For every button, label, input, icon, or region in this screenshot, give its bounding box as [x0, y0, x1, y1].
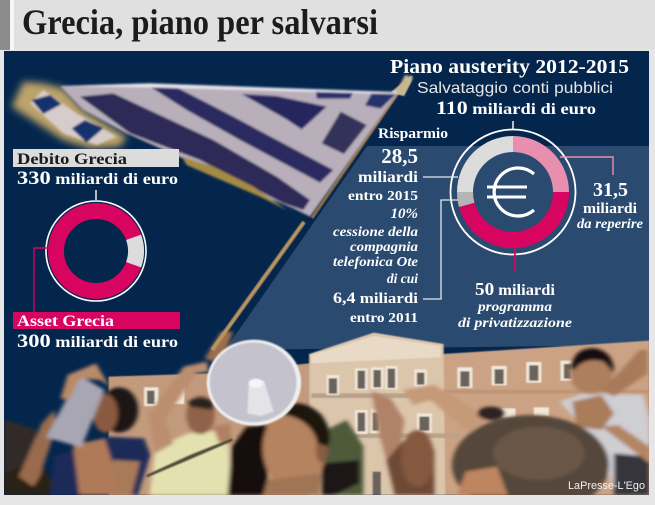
text block: Risparmio: compagnia: [350, 239, 418, 254]
label: Asset Grecia: Asset Grecia: [17, 313, 114, 330]
heading: Piano austerity: [390, 59, 628, 114]
flag: [12, 75, 413, 217]
segment: 28,5 risparmio: [457, 136, 513, 192]
flag pole: [212, 75, 412, 350]
person in yellow shirt: [150, 430, 232, 495]
text block: 31,5 miliardi: [577, 179, 643, 231]
big head foreground: [452, 415, 609, 505]
lighter blue backdrop panel: [225, 146, 649, 350]
text block: Risparmio: Risparmio: [378, 126, 448, 142]
text block: Risparmio: cessione della: [333, 224, 418, 239]
text block: Risparmio: 6,4 miliardi: [333, 290, 418, 307]
donut chart: Debito vs Asset Grecia: [34, 190, 146, 312]
title: Grecia, piano per salvarsi: [22, 2, 378, 42]
segment: 6,4 Ote: [457, 192, 474, 207]
text block: 50 miliardi: [458, 279, 572, 331]
text block: 31,5 miliardi: da reperire: [577, 216, 643, 231]
text block: Risparmio: entro 2011: [350, 310, 418, 325]
person left with bottle: [50, 437, 150, 495]
text block: 50 miliardi: programma: [477, 300, 552, 315]
value: 300 miliardi: 300 miliardi di euro: [17, 331, 178, 352]
text block: Risparmio: 28,5: [381, 144, 418, 168]
text block: Risparmio: telefonica Ote: [333, 254, 418, 269]
text block: 31,5 miliardi: miliardi: [583, 201, 637, 217]
text block: 50 miliardi: 50 miliardi: [475, 279, 556, 299]
text block: Risparmio: miliardi: [358, 169, 419, 186]
photo: megaphone: [146, 340, 301, 477]
connector lines: [512, 121, 514, 129]
gap segment: [126, 235, 144, 267]
text block: Risparmio: entro 2015: [348, 188, 418, 203]
flag fringe tail: [12, 82, 127, 148]
connector lines: [95, 190, 97, 200]
donut chart: 110 miliardi: [423, 121, 613, 299]
photo: crowd: [4, 332, 650, 505]
title bar: [0, 0, 655, 50]
text block: Risparmio: di cui: [387, 271, 418, 286]
segment: 31,5 da reperire: [513, 136, 569, 192]
label: Asset Grecia: [13, 312, 180, 330]
central man: [228, 425, 267, 495]
segment: 50 privatizzazione: [459, 192, 569, 248]
credit: LaPresse-L'Ego: [568, 480, 645, 492]
value: 330 miliardi: 330 miliardi di euro: [17, 168, 178, 189]
text block: Risparmio: [333, 126, 448, 325]
text block: 50 miliardi: di privatizzazione: [458, 316, 572, 331]
text block: 31,5 miliardi: 31,5: [593, 179, 628, 201]
text block: Risparmio: 10%: [390, 206, 418, 222]
photo: parliament building: [109, 333, 650, 495]
icon: euro: [487, 168, 534, 216]
right man: [560, 393, 650, 495]
heading: Piano austerity: Salvataggio conti pubblici: [417, 80, 613, 97]
heading: Piano austerity: 110 miliardi di euro: [436, 98, 596, 119]
heading: Piano austerity: Piano austerity 2012-2015: [390, 56, 629, 78]
raised arms: [372, 392, 404, 460]
label: Debito Grecia: [13, 149, 179, 168]
label: Debito Grecia: Debito Grecia: [17, 151, 127, 168]
